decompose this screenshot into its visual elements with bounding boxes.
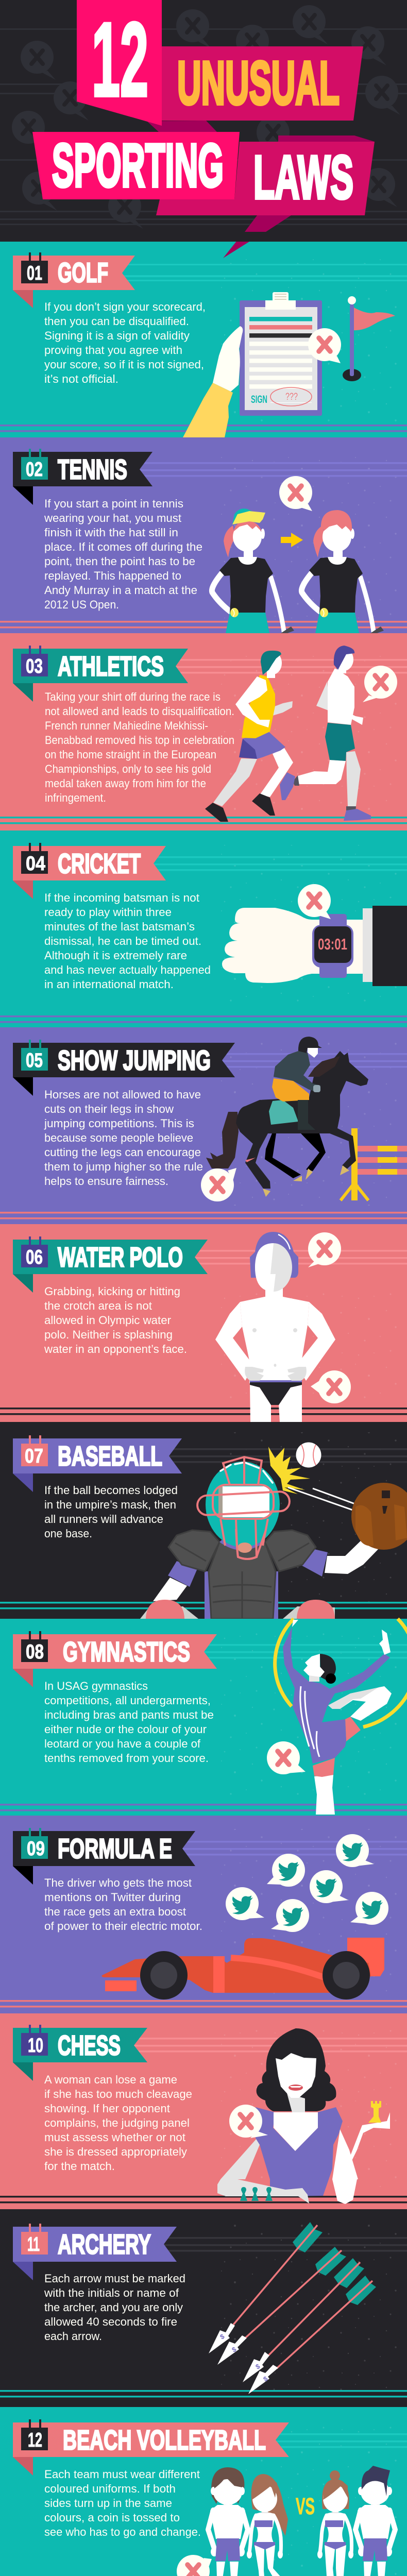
panel: 04 cricket xyxy=(0,831,407,1027)
icon: wristwatch: 03:01 xyxy=(318,935,347,953)
icon: arrow 2: $ xyxy=(230,2345,238,2354)
banner: 04 cricket: 04 xyxy=(26,853,45,875)
icon: catcher glove xyxy=(351,1483,407,1550)
text: formula e rule: of power to their electric motor. xyxy=(44,1920,202,1933)
text: tennis rule: finish it with the hat still in xyxy=(44,526,178,539)
text: golf rule xyxy=(44,300,206,385)
panel: 08 gymnastics xyxy=(0,1619,407,1816)
panel: title: 12 xyxy=(92,1,148,118)
banner: 07 baseball xyxy=(13,1435,182,1492)
text: baseball rule: in the umpire’s mask, then xyxy=(44,1498,176,1511)
icon: arrow 2 xyxy=(217,2247,346,2365)
text: beach volleyball rule: sides turn up in the same xyxy=(44,2497,172,2510)
icon: female player team two xyxy=(317,2470,353,2576)
icon: arrow 1: $ xyxy=(218,2332,226,2341)
icon: cross speech bubble xyxy=(267,1741,306,1774)
text: archery rule: allowed 40 seconds to fire xyxy=(44,2315,177,2328)
icon: chess rook xyxy=(368,2101,381,2123)
icon: arrow xyxy=(281,533,303,547)
text: athletics rule: Benabbad removed his top in celebration xyxy=(45,734,234,747)
banner: 08 gymnastics: GYMNASTICS xyxy=(63,1636,190,1667)
text: water polo rule: polo. Neither is splashing xyxy=(44,1328,173,1341)
text: golf rule: Signing it is a sign of validity xyxy=(44,329,190,342)
icon: cross speech bubble xyxy=(279,476,312,511)
banner: 11 archery: 11 xyxy=(27,2233,40,2256)
text: beach volleyball rule: Each team must wear different xyxy=(44,2468,200,2481)
banner: 02 tennis: TENNIS xyxy=(58,454,127,485)
icon: wristwatch xyxy=(312,914,353,978)
text: baseball rule: If the ball becomes lodged xyxy=(44,1484,178,1497)
icon: golf flag xyxy=(343,296,395,381)
icon: baseball umpire xyxy=(140,1457,379,1619)
banner: 10 chess: CHESS xyxy=(58,2030,121,2061)
panel: 01 golf xyxy=(0,215,407,437)
icon: runner in yellow vest xyxy=(205,651,293,822)
banner: 09 formula e: FORMULA E xyxy=(58,1833,172,1864)
text: gymnastics rule xyxy=(44,1680,214,1765)
text: show jumping rule: helps to ensure fairness. xyxy=(44,1175,168,1188)
text: cricket rule: minutes of the last batsman’s xyxy=(44,920,195,933)
text: gymnastics rule: leotard or you have a couple of xyxy=(44,1737,201,1750)
text: archery rule: Each arrow must be marked xyxy=(44,2272,185,2285)
text: cricket rule xyxy=(44,891,211,991)
text: formula e rule xyxy=(44,1876,202,1933)
text: beach volleyball rule xyxy=(44,2468,201,2538)
icon: cross speech bubble upper xyxy=(308,1232,341,1267)
icon: clipboard scorecard: SIGN xyxy=(251,394,267,405)
icon: female player team one xyxy=(247,2474,288,2576)
text: gymnastics rule: including bras and pants must be xyxy=(44,1708,214,1721)
icon: chess pawns xyxy=(240,2187,273,2201)
panel: 11 archery xyxy=(0,2209,407,2407)
panel: 12 beach volleyball xyxy=(0,2407,407,2576)
icon: woman with chess piece xyxy=(217,2028,390,2204)
text: athletics rule: French runner Mahiedine Mekhissi- xyxy=(45,719,208,732)
banner: 12 beach volleyball xyxy=(13,2419,289,2476)
text: tennis rule xyxy=(44,497,202,611)
banner: 10 chess xyxy=(13,2025,147,2081)
text: baseball rule: all runners will advance xyxy=(44,1513,163,1526)
text: show jumping rule: cuts on their legs in show xyxy=(44,1103,174,1115)
icon: tennis player without hat xyxy=(301,510,384,635)
banner: 08 gymnastics xyxy=(13,1631,217,1687)
icon: clipboard scorecard xyxy=(240,292,322,416)
icon: twitter bubbles xyxy=(226,1834,388,1932)
banner: 07 baseball: BASEBALL xyxy=(58,1440,162,1471)
banner: 01 golf: 01 xyxy=(27,262,42,284)
icon: cross speech bubble lower xyxy=(311,1370,351,1403)
banner: 03 athletics xyxy=(13,646,188,702)
text: archery rule: each arrow. xyxy=(44,2330,102,2343)
panel: 06 water polo xyxy=(0,1224,407,1422)
text: cricket rule: dismissal, he can be timed out. xyxy=(44,935,201,947)
icon: cross speech bubble xyxy=(308,328,341,363)
text: chess rule: complains, the judging panel xyxy=(44,2116,190,2129)
text: beach volleyball rule: colours, a coin is tossed to xyxy=(44,2511,180,2524)
text: cricket rule: in an international match. xyxy=(44,978,174,991)
text: cricket rule: ready to play within three xyxy=(44,906,172,919)
icon: male player team two xyxy=(355,2466,395,2576)
text: gymnastics rule: In USAG gymnastics xyxy=(44,1680,148,1692)
banner: 07 baseball: 07 xyxy=(25,1445,43,1467)
banner: 06 water polo xyxy=(13,1236,208,1293)
banner: 03 athletics: ATHLETICS xyxy=(58,651,164,682)
panel: 09 formula e xyxy=(0,1816,407,2013)
text: gymnastics rule: tenths removed from your score. xyxy=(44,1752,209,1765)
text: formula e rule: mentions on Twitter during xyxy=(44,1891,181,1904)
icon: water polo player xyxy=(215,1232,335,1422)
icon: cross speech bubble xyxy=(201,1168,236,1201)
banner: 01 golf: GOLF xyxy=(58,258,108,289)
panel: 03 athletics xyxy=(0,633,407,831)
banner: 05 show jumping: 05 xyxy=(26,1049,43,1072)
text: tennis rule: place. If it comes off during the xyxy=(44,540,202,553)
banner: 02 tennis xyxy=(13,449,152,505)
icon: fist with sleeve xyxy=(222,906,407,986)
icon: cross speech bubble xyxy=(298,884,331,919)
text: athletics rule: medal taken away from him for the xyxy=(45,777,206,790)
text: beach volleyball rule: coloured uniforms. If both xyxy=(44,2482,176,2495)
ribbon tail from title xyxy=(223,215,291,258)
text: athletics rule: infringement. xyxy=(45,791,106,804)
text: show jumping rule: Horses are not allowed to have xyxy=(44,1088,201,1101)
text: water polo rule: allowed in Olympic water xyxy=(44,1314,171,1327)
text: chess rule: if she has too much cleavage xyxy=(44,2088,192,2100)
text: cricket rule: If the incoming batsman is not xyxy=(44,891,199,904)
text: cricket rule: and has never actually happened xyxy=(44,963,211,976)
text: archery rule xyxy=(44,2272,185,2343)
banner: 05 show jumping xyxy=(13,1040,235,1096)
panel: 02 tennis xyxy=(0,437,407,635)
text: golf rule: then you can be disqualified. xyxy=(44,315,189,328)
text: chess rule: showing. If her opponent xyxy=(44,2102,170,2115)
text: show jumping rule: because some people believe xyxy=(44,1131,193,1144)
text: gymnastics rule: competitions, all undergarments, xyxy=(44,1694,211,1707)
text: baseball rule xyxy=(44,1484,178,1540)
text: chess rule: A woman can lose a game xyxy=(44,2073,177,2086)
text: athletics rule: Championships, only to see his gold xyxy=(45,762,211,775)
text: show jumping rule: them to jump higher so the rule xyxy=(44,1160,203,1173)
banner: 06 water polo: WATER POLO xyxy=(58,1242,183,1273)
banner: 11 archery: ARCHERY xyxy=(58,2229,151,2260)
icon: formula e race car xyxy=(102,1938,384,1999)
text: baseball rule: one base. xyxy=(44,1527,92,1540)
text: water polo rule: Grabbing, kicking or hitting xyxy=(44,1285,180,1298)
text: beach volleyball rule: see who has to go and change. xyxy=(44,2526,201,2538)
text: show jumping rule: jumping competitions. This is xyxy=(44,1117,194,1130)
icon: cross speech bubble xyxy=(177,2555,212,2576)
text: chess rule xyxy=(44,2073,192,2173)
icon: arrow 4: $ xyxy=(262,2375,269,2383)
text: chess rule: she is dressed appropriately xyxy=(44,2145,187,2158)
icon: gymnast with hoop xyxy=(275,1619,407,1815)
banner: 01 golf xyxy=(13,252,135,308)
text: cricket rule: Although it is extremely rare xyxy=(44,949,187,962)
icon: tennis player with hat xyxy=(212,509,294,635)
text: chess rule: for the match. xyxy=(44,2160,115,2173)
icon: clipboard scorecard: ??? xyxy=(285,392,298,402)
text: tennis rule: point, then the point has to be xyxy=(44,555,195,568)
text: tennis rule: Andy Murray in a match at the xyxy=(44,584,197,597)
banner: 05 show jumping: SHOW JUMPING xyxy=(58,1045,211,1076)
text: tennis rule: wearing your hat, you must xyxy=(44,512,181,524)
icon: horse and rider xyxy=(206,1037,368,1197)
banner: 11 archery xyxy=(13,2224,177,2280)
text: golf rule: it’s not official. xyxy=(44,372,118,385)
text: golf rule: your score, so if it is not signed, xyxy=(44,358,204,371)
text: formula e rule: The driver who gets the most xyxy=(44,1876,192,1889)
text: athletics rule xyxy=(45,690,234,804)
text: golf rule: proving that you agree with xyxy=(44,344,182,357)
banner: 03 athletics: 03 xyxy=(26,655,43,677)
banner: 12 beach volleyball: 12 xyxy=(28,2429,42,2451)
icon: cross speech bubble xyxy=(229,2105,268,2138)
title: sporting: SPORTING xyxy=(52,131,224,200)
icon: arrow 3 xyxy=(243,2258,364,2382)
icon: hand and sleeve xyxy=(183,326,243,437)
text: tennis rule: replayed. This happened to xyxy=(44,569,181,582)
icon: arrow 1 xyxy=(209,2222,323,2353)
text: vs: VS xyxy=(296,2493,315,2519)
text: tennis rule: 2012 US Open. xyxy=(44,598,119,611)
text: formula e rule: the race gets an extra boost xyxy=(44,1905,186,1918)
banner: 06 water polo: 06 xyxy=(26,1246,43,1268)
panel: 05 show jumping xyxy=(0,1027,407,1224)
banner: 02 tennis: 02 xyxy=(26,459,43,481)
icon: cross speech bubble xyxy=(363,666,397,702)
banner: 04 cricket xyxy=(13,843,166,899)
text: tennis rule: If you start a point in tennis xyxy=(44,497,183,510)
text: chess rule: must assess whether or not xyxy=(44,2131,185,2144)
text: athletics rule: Taking your shirt off during the race is xyxy=(45,690,221,703)
text: athletics rule: not allowed and leads to disqualification. xyxy=(45,705,234,718)
text: water polo rule: the crotch area is not xyxy=(44,1299,152,1312)
text: gymnastics rule: either nude or the colour of your xyxy=(44,1723,207,1736)
banner: 10 chess: 10 xyxy=(28,2035,43,2057)
text: archery rule: the archer, and you are only xyxy=(44,2301,183,2314)
text: water polo rule: water in an opponent’s face. xyxy=(44,1343,187,1355)
icon: shirtless runner xyxy=(280,646,371,821)
banner: 09 formula e xyxy=(13,1828,195,1885)
text: archery rule: with the initials or name of xyxy=(44,2286,179,2299)
icon: male player team one xyxy=(208,2467,248,2576)
text: athletics rule: on the home straight in the European xyxy=(45,748,216,761)
text: show jumping rule xyxy=(44,1088,203,1188)
banner: 08 gymnastics: 08 xyxy=(26,1641,44,1663)
text: show jumping rule: cutting the legs can encourage xyxy=(44,1146,201,1159)
panel: 07 baseball xyxy=(0,1422,407,1619)
icon: baseball impact xyxy=(268,1443,400,1527)
banner: 12 beach volleyball: BEACH VOLLEYBALL xyxy=(63,2425,266,2455)
panel: 10 chess xyxy=(0,2013,407,2209)
banner: 09 formula e: 09 xyxy=(27,1838,45,1860)
text: golf rule: If you don’t sign your scorecard, xyxy=(44,300,206,313)
icon: arrow 3: $ xyxy=(254,2362,262,2371)
banner: 04 cricket: CRICKET xyxy=(58,848,141,879)
panel: title xyxy=(0,0,407,242)
icon: arrow 4 xyxy=(248,2276,376,2394)
text: water polo rule xyxy=(44,1285,187,1355)
icon: jump fence xyxy=(341,1128,407,1200)
